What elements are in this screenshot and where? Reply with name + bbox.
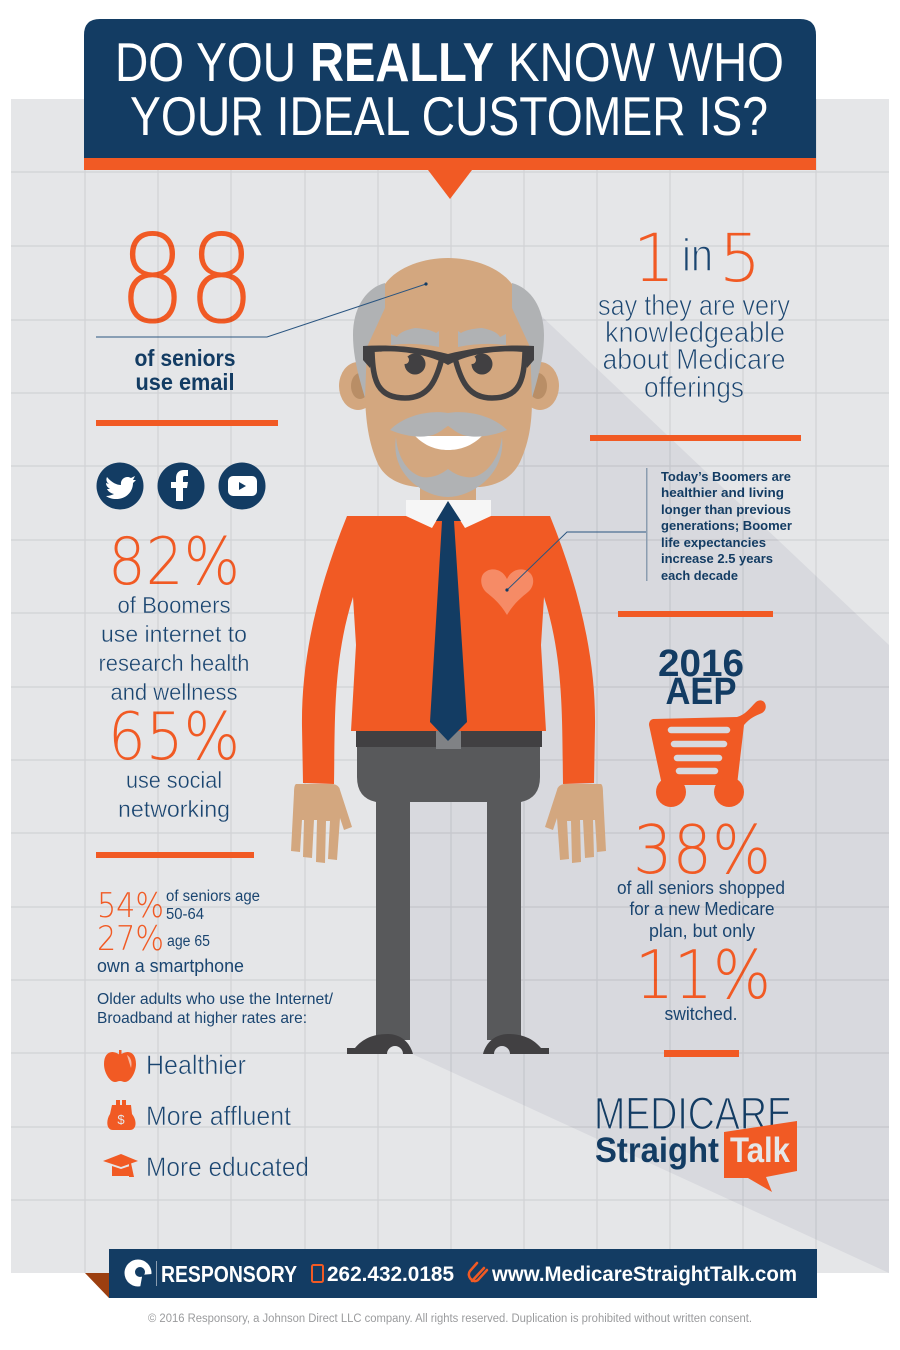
text: of all seniors shopped <box>617 877 785 941</box>
icon: link <box>469 1263 487 1281</box>
callout line: seniors email <box>96 282 428 337</box>
text: use social networking: use social <box>126 767 222 793</box>
title text: REALLY <box>310 31 494 93</box>
beard <box>395 437 502 497</box>
text: of seniors use email: of seniors <box>134 345 236 371</box>
text: of seniors use email <box>134 345 236 395</box>
tie <box>430 501 467 741</box>
text: boomers healthier: increase 2.5 years <box>661 552 773 566</box>
text: smartphone stats: own a smartphone <box>97 956 244 976</box>
text: in: in <box>682 229 713 281</box>
icon: youtube <box>218 462 266 510</box>
text: smartphone stats: of seniors age <box>166 888 260 905</box>
text: boomers healthier: each decade <box>661 569 738 583</box>
text: smartphone stats: Older adults who use the Internet/ <box>97 991 334 1008</box>
text: of all seniors shopped: of all seniors shopped <box>617 877 785 898</box>
text: of Boomers: of Boomers <box>118 592 230 618</box>
icon: shopping cart <box>649 700 766 807</box>
head <box>365 258 532 487</box>
icons: benefits list <box>103 1050 138 1177</box>
text: boomers healthier <box>661 470 792 583</box>
text: smartphone stats <box>97 888 334 1027</box>
character illustration <box>291 258 606 1054</box>
glasses <box>363 345 534 398</box>
text: say they are very knowledgeable: say they are very <box>598 290 790 322</box>
text: of all seniors shopped: for a new Medicare <box>630 898 774 919</box>
text: use social networking: networking <box>118 796 230 822</box>
title text <box>115 31 784 147</box>
heading: 2016 AEP <box>658 643 744 713</box>
logo: Medicare Straight Talk <box>594 1088 797 1192</box>
text: switched: switched. <box>664 1003 738 1024</box>
stat: 38%: 38% <box>633 811 771 889</box>
list labels: More educated <box>146 1152 309 1182</box>
text: say they are very knowledgeable <box>598 290 790 404</box>
eyes <box>401 354 492 374</box>
text: boomers healthier: Today’s Boomers are <box>661 470 791 484</box>
heading: 2016 AEP: AEP <box>666 671 736 713</box>
left hand <box>291 784 352 863</box>
text: boomers healthier: healthier and living <box>661 486 784 500</box>
stat: 65%: 65% <box>108 700 240 775</box>
copyright: © 2016 Responsory, a Johnson Direct LLC company. All rights reserved. Duplication is prohibited without written consent. <box>148 1313 752 1325</box>
logo: Medicare Straight Talk: MEDICARE <box>594 1088 792 1139</box>
logo: Medicare Straight Talk: Talk <box>730 1131 790 1170</box>
icon: facebook <box>158 462 204 510</box>
neck and ears <box>339 362 559 505</box>
text: of Boomers: research health <box>98 650 250 676</box>
stat: 88: 88 <box>118 209 256 351</box>
shirt <box>302 516 595 784</box>
stat: 11%: 11% <box>635 936 771 1014</box>
icon: apple <box>104 1050 136 1082</box>
callout line: heart <box>505 532 647 592</box>
text: say they are very knowledgeable: knowledgeable <box>605 317 785 349</box>
list labels <box>146 1050 309 1182</box>
stat: 54%: 54% <box>97 886 164 926</box>
title banner <box>84 19 816 199</box>
icon: twitter <box>96 462 144 510</box>
buckle <box>436 731 461 749</box>
title text: YOUR IDEAL CUSTOMER IS? <box>130 85 768 147</box>
social icons <box>96 462 266 510</box>
stat: 1: 1 <box>633 220 675 297</box>
right hand <box>545 784 606 863</box>
list labels: Healthier <box>146 1050 246 1080</box>
heart <box>481 569 533 615</box>
icon: purse: $ <box>117 1112 125 1127</box>
stat: 27%: 27% <box>97 919 164 959</box>
trousers <box>357 747 540 1040</box>
title text: DO YOU <box>115 31 296 93</box>
belt <box>356 731 542 747</box>
text: boomers healthier: generations; Boomer <box>661 519 792 533</box>
text: of seniors use email: use email <box>136 369 234 395</box>
eyebrows <box>391 328 506 347</box>
text: phone number: 262.432.0185 <box>327 1263 454 1286</box>
text: use social networking <box>118 767 230 822</box>
moustache <box>390 412 507 437</box>
stat: 5: 5 <box>719 220 761 297</box>
text: Responsory: RESPONSORY <box>161 1261 297 1287</box>
heading: 2016 AEP: 2016 <box>658 643 744 685</box>
text: smartphone stats: Broadband at higher rates are: <box>97 1010 307 1027</box>
text: smartphone stats: age 65 <box>167 933 210 950</box>
text: smartphone stats: 50-64 <box>166 906 204 923</box>
text: of Boomers <box>98 592 250 705</box>
text: of Boomers: and wellness <box>110 679 238 705</box>
text: boomers healthier: life expectancies <box>661 536 766 550</box>
text: say they are very knowledgeable: offerings <box>644 372 744 404</box>
text: of Boomers: use internet to <box>101 621 247 647</box>
list labels: More affluent <box>146 1101 291 1131</box>
text: boomers healthier: longer than previous <box>661 503 791 517</box>
text: of all seniors shopped: plan, but only <box>649 920 756 941</box>
text: website: www.MedicareStraightTalk.com <box>491 1263 797 1286</box>
icon: responsory logo <box>124 1260 152 1288</box>
footer bar <box>85 1249 817 1298</box>
logo: Medicare Straight Talk: Straight <box>595 1131 719 1170</box>
smile <box>415 436 482 450</box>
icon: graduation cap <box>103 1154 138 1177</box>
shoes <box>347 1034 549 1054</box>
collar <box>406 500 491 528</box>
icon: phone <box>312 1265 323 1282</box>
title text: KNOW WHO <box>508 31 784 93</box>
hair <box>353 283 544 398</box>
text: say they are very knowledgeable: about Medicare <box>602 344 786 376</box>
stat: 82%: 82% <box>108 525 240 600</box>
